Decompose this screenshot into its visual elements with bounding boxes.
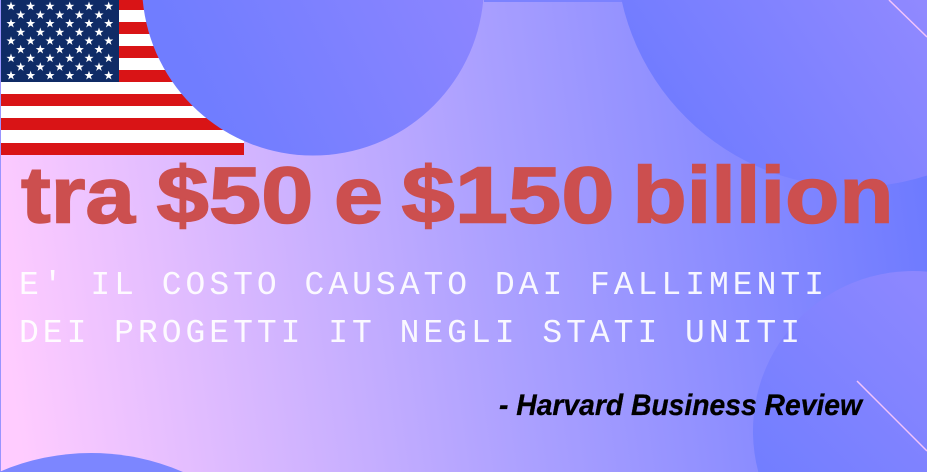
- heading: cost range: tra: [21, 150, 136, 240]
- text block: description: DEI PROGETTI IT NEGLI STATI UNITI: [19, 315, 800, 352]
- heading: cost range: [21, 150, 894, 240]
- text block: description: E' IL COSTO CAUSATO DAI FALLIMENTI: [19, 267, 824, 304]
- icon: United States flag: [1, 0, 244, 155]
- decorative line: top right: [889, 0, 927, 37]
- decorative circle: top centre, over the flag: [143, 0, 483, 156]
- text: source attribution: - Harvard Business Review: [499, 389, 864, 422]
- text block: description: [19, 267, 824, 352]
- heading: cost range: $150: [402, 150, 614, 240]
- decorative circle: top right: [622, 0, 927, 187]
- decorative line: bottom right: [857, 381, 927, 451]
- decorative circle: bottom left: [0, 453, 183, 472]
- heading: cost range: e: [334, 150, 383, 240]
- decorative circle: bottom right: [753, 271, 927, 472]
- heading: cost range: $50: [156, 150, 314, 240]
- heading: cost range: billion: [632, 150, 894, 240]
